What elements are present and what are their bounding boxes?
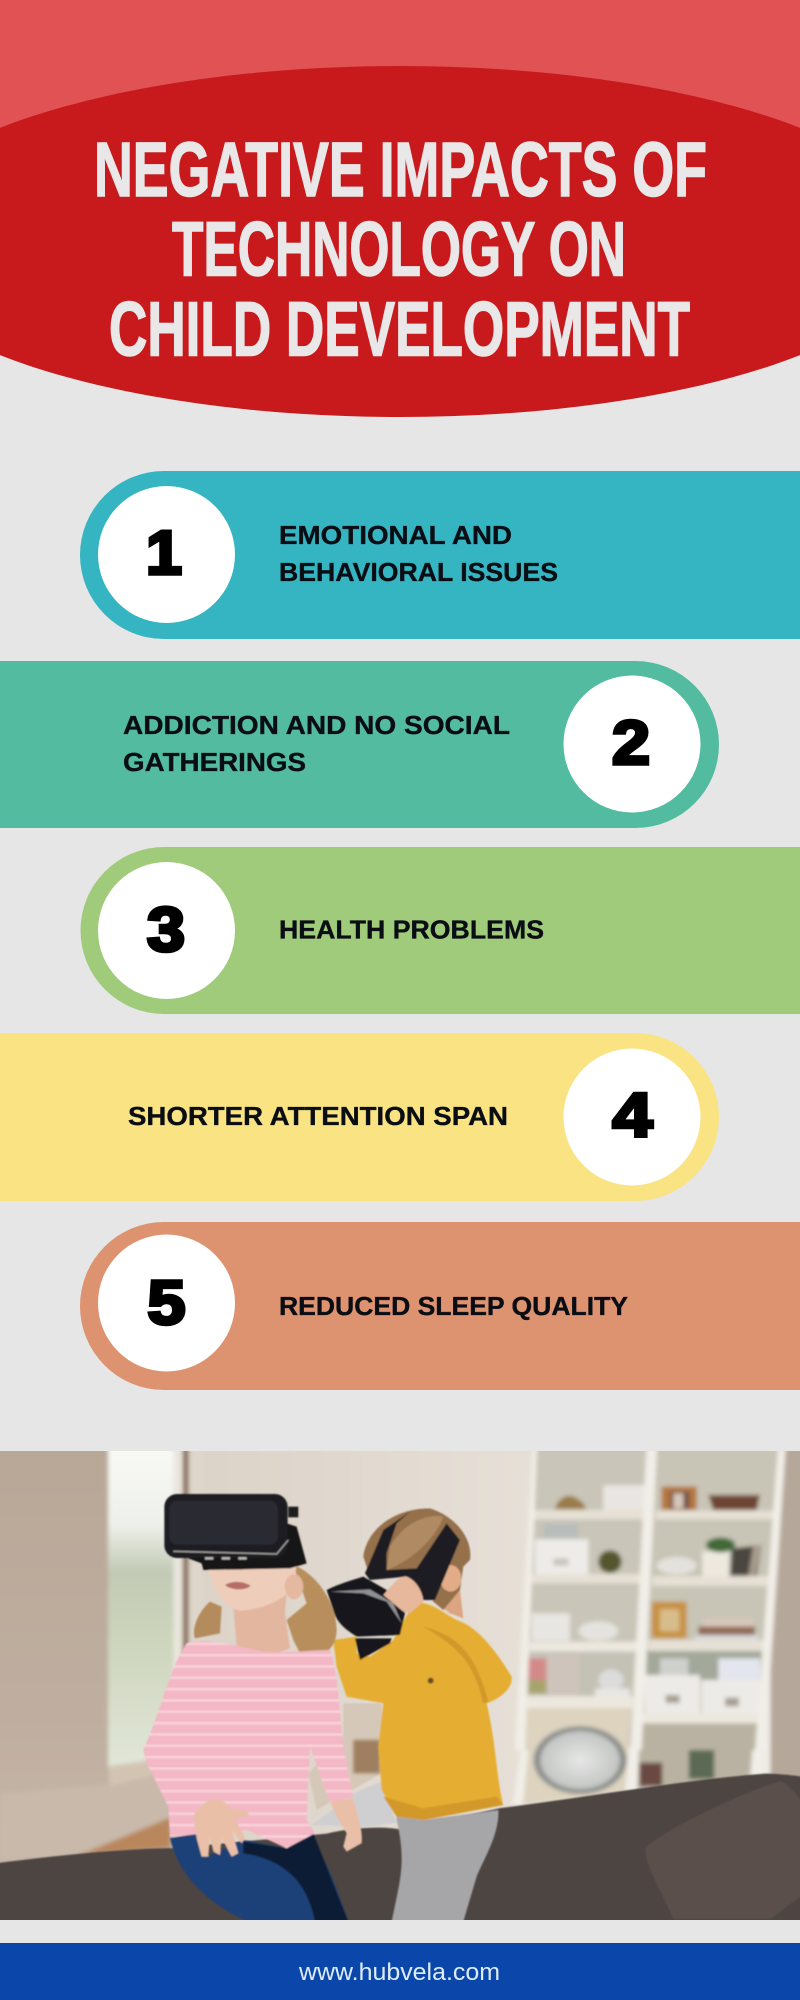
website url: www.hubvela.com (298, 1959, 500, 1986)
header banner (0, 0, 800, 417)
item 2: addiction and no social gatherings: 2 (612, 709, 650, 778)
photo: two children wearing VR headsets (0, 1430, 800, 1946)
girl (143, 1494, 362, 1922)
title (94, 127, 707, 372)
item 5: reduced sleep quality (80, 1222, 800, 1390)
room background and bookshelves (0, 1451, 800, 1864)
item 4: shorter attention span (0, 1033, 719, 1201)
item 3: health problems: 3 (147, 896, 185, 965)
item 5: reduced sleep quality: 5 (148, 1269, 186, 1338)
item 2: addiction and no social gatherings (0, 661, 719, 828)
item 2: addiction and no social gatherings: ADDICTION AND NO SOCIAL (123, 712, 510, 740)
item 5: reduced sleep quality: REDUCED SLEEP QUALITY (279, 1293, 628, 1321)
item 1: emotional and behavioral issues (80, 471, 800, 639)
item 2: addiction and no social gatherings: GATHERINGS (123, 749, 306, 777)
item 4: shorter attention span: SHORTER ATTENTION SPAN (128, 1103, 508, 1131)
item 1: emotional and behavioral issues: 1 (146, 519, 182, 588)
children (143, 1494, 512, 1922)
item 1: emotional and behavioral issues: BEHAVIORAL ISSUES (279, 559, 558, 587)
footer bar (0, 1943, 800, 2000)
boy (308, 1508, 512, 1922)
sofa (0, 1772, 800, 1920)
item 3: health problems: HEALTH PROBLEMS (279, 916, 544, 944)
item 3: health problems (81, 847, 800, 1014)
item 4: shorter attention span: 4 (612, 1081, 653, 1150)
item 1: emotional and behavioral issues: EMOTIONAL AND (279, 522, 512, 550)
